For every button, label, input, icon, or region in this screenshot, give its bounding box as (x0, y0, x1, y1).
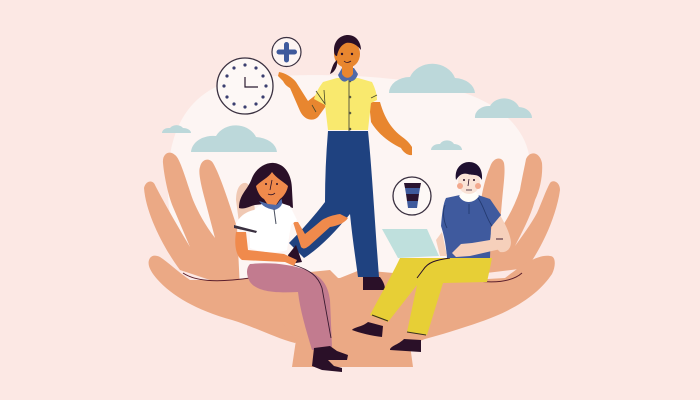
peach back arm (488, 210, 511, 252)
hair (456, 162, 482, 180)
sleeve folds (312, 90, 377, 112)
blue polo (441, 195, 501, 258)
right thumb (340, 256, 555, 345)
near arm (436, 232, 447, 256)
icon: clock (217, 58, 273, 114)
left index finger, behind woman (236, 183, 256, 230)
forearm (452, 228, 505, 257)
background white blob (168, 75, 530, 295)
person: seated man with laptop (352, 162, 511, 352)
cloud: right small (475, 98, 532, 118)
white blouse (235, 203, 297, 252)
head (334, 40, 360, 68)
cloud: right tiny (431, 140, 462, 150)
shoes (312, 346, 348, 372)
person: seated woman (234, 163, 348, 372)
cloud: left large (191, 125, 277, 152)
cloud: left tiny (162, 125, 191, 133)
yellow trousers (370, 258, 492, 335)
pink trousers (247, 263, 332, 350)
shoes (352, 322, 383, 337)
right hand (340, 153, 560, 345)
shoe (363, 277, 385, 290)
left palm crease (183, 273, 250, 281)
laptop (382, 229, 439, 258)
hair back (239, 163, 293, 209)
icon: coffee cup (393, 177, 431, 215)
neck and collar (338, 68, 358, 82)
cloud: top right large (389, 64, 475, 93)
shirt buttons (349, 80, 351, 130)
raised arm (278, 72, 326, 120)
hair (330, 35, 361, 74)
yellow shirt (314, 78, 377, 130)
face (341, 53, 343, 55)
icon: plus (272, 38, 301, 66)
person: standing woman in yellow shirt (278, 35, 412, 290)
left outer finger (144, 153, 240, 290)
reaching arm (293, 214, 348, 249)
white collar (459, 192, 479, 202)
trousers (289, 131, 379, 277)
left hand (144, 153, 360, 343)
right hand fingers (470, 153, 560, 275)
seat shadow (288, 245, 302, 264)
head (256, 172, 288, 205)
head (458, 170, 480, 194)
left arm (235, 232, 297, 266)
right palm crease (477, 273, 522, 282)
left thumb (149, 256, 360, 343)
blue collar (262, 201, 281, 209)
lowered arm (369, 102, 412, 155)
palm and wrist base (280, 270, 440, 367)
